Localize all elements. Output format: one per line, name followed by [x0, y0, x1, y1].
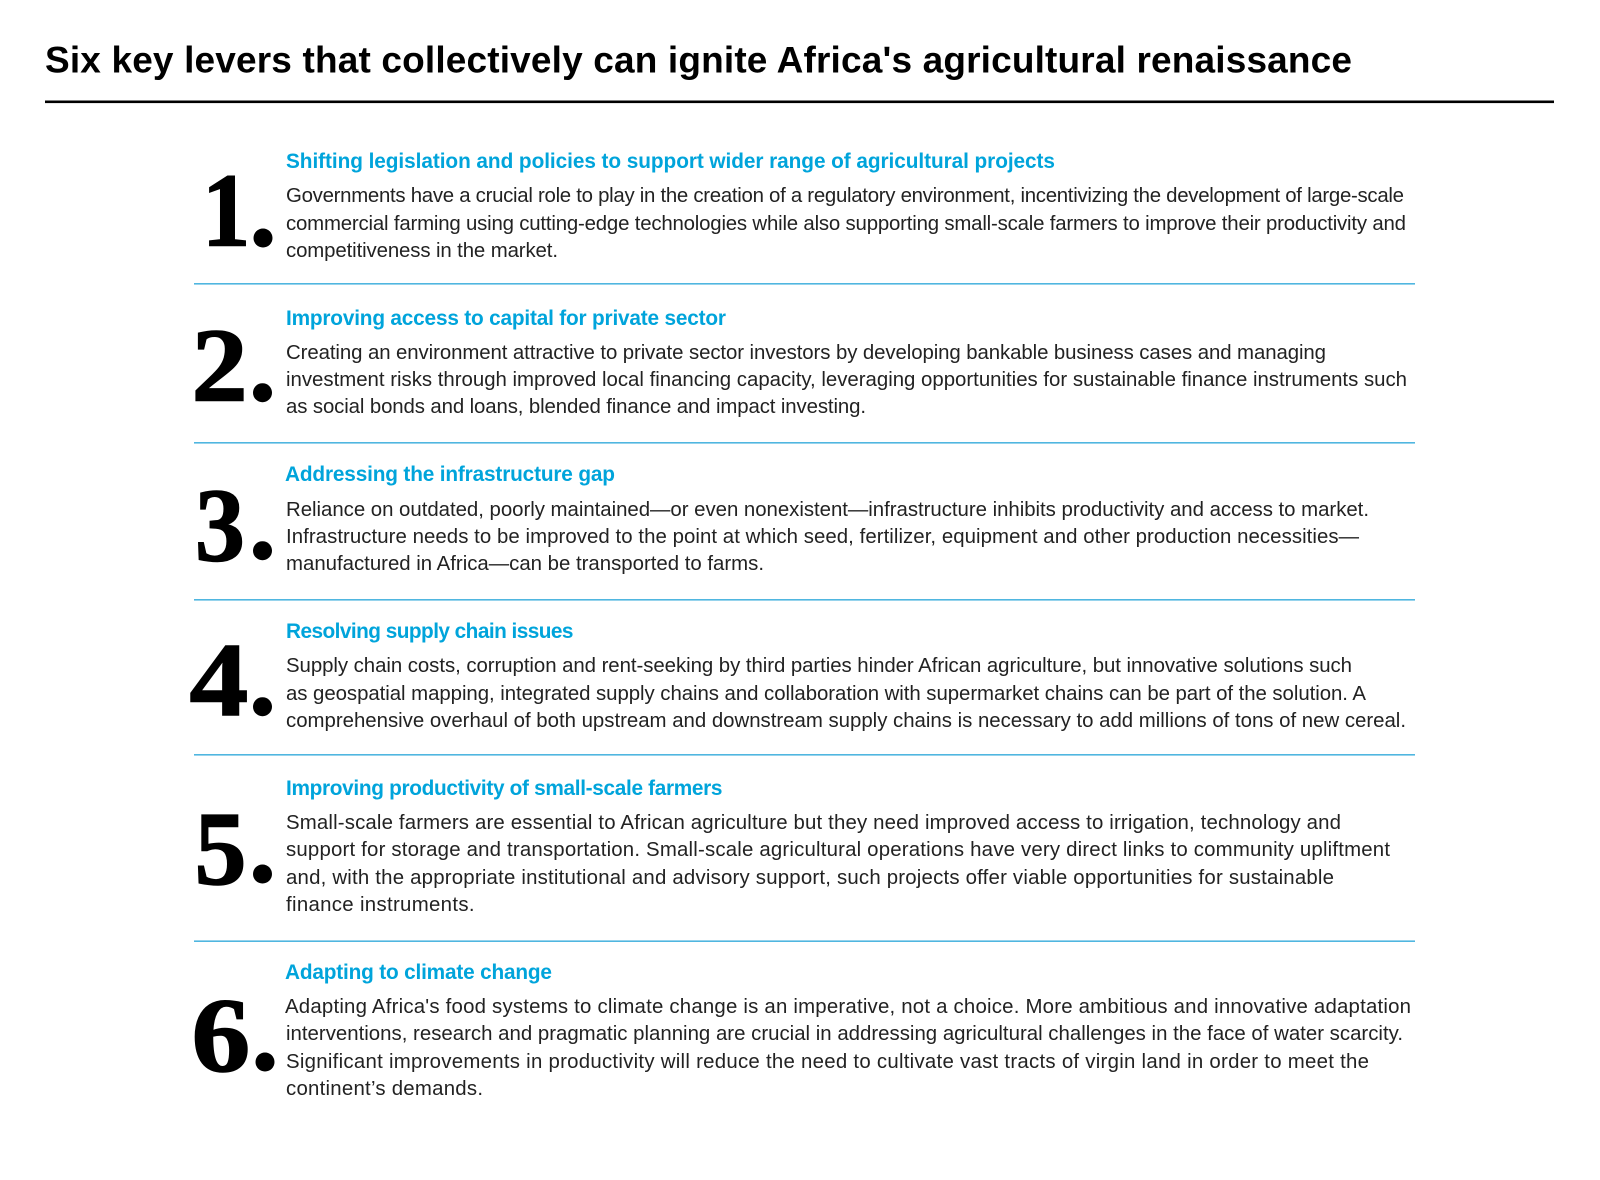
body text: lever 1: commercial farming using cutting-edge technologies while also supporting small-scale farmers to improve their productivity and	[286, 213, 1406, 235]
body text: lever 3	[286, 499, 1369, 575]
numeral 1	[202, 152, 272, 268]
panel: lever 5	[194, 777, 1390, 916]
numeral 2: 2	[192, 307, 248, 424]
panel: lever 2	[192, 307, 1407, 424]
body text: lever 3: Reliance on outdated, poorly maintained—or even nonexistent—infrastructure inhibits productivity and access to market.	[286, 499, 1369, 521]
numeral 3	[195, 468, 272, 584]
heading: lever 1: Shifting legislation and policies to support wider range of agricultural projects	[286, 150, 1055, 173]
body text: lever 4: as geospatial mapping, integrated supply chains and collaboration with supermarket chains can be part of the solution. A	[286, 683, 1366, 705]
body text: lever 3: Infrastructure needs to be improved to the point at which seed, fertilizer, equipment and other production necessities—	[286, 526, 1360, 548]
panel: lever 1	[202, 150, 1406, 268]
body text: lever 6: Adapting Africa's food systems to climate change is an imperative, not a choice. More ambitious and innovative adaptation	[285, 996, 1411, 1018]
numeral 1: 1	[202, 152, 250, 268]
body text: lever 4	[286, 655, 1406, 732]
body text: lever 4: comprehensive overhaul of both upstream and downstream supply chains is necessary to add millions of tons of new cereal.	[286, 710, 1406, 732]
numeral 5: 5	[194, 791, 246, 907]
body text: lever 3: manufactured in Africa—can be transported to farms.	[286, 553, 764, 575]
heading: lever 5: Improving productivity of small-scale farmers	[286, 777, 722, 800]
title: Six key levers that collectively can ignite Africa's agricultural renaissance	[45, 40, 1352, 80]
body text: lever 2: as social bonds and loans, blended finance and impact investing.	[286, 396, 866, 418]
heading: lever 2: Improving access to capital for private sector	[286, 307, 726, 330]
panel: lever 3	[195, 463, 1369, 584]
body text: lever 5: and, with the appropriate institutional and advisory support, such projects offer viable opportunities for sustainable	[286, 867, 1334, 889]
panel: lever 6	[192, 961, 1411, 1100]
heading: lever 6: Adapting to climate change	[285, 961, 552, 984]
heading: lever 3: Addressing the infrastructure gap	[285, 463, 615, 486]
body text: lever 1	[286, 185, 1406, 262]
numeral 6: 6	[192, 977, 250, 1095]
body text: lever 2	[286, 342, 1407, 418]
body text: lever 6: interventions, research and pragmatic planning are crucial in addressing agricultural challenges in the face of water scarcity.	[286, 1023, 1403, 1045]
body text: lever 6: continent’s demands.	[286, 1078, 483, 1100]
numeral 3: 3	[195, 468, 245, 584]
body text: lever 5	[286, 812, 1390, 916]
heading: lever 4: Resolving supply chain issues	[286, 620, 574, 643]
body text: lever 4: Supply chain costs, corruption and rent-seeking by third parties hinder African agriculture, but innovative solutions such	[286, 655, 1352, 677]
body text: lever 2: Creating an environment attractive to private sector investors by developing bankable business cases and managing	[286, 342, 1326, 364]
body text: lever 6: Significant improvements in productivity will reduce the need to cultivate vast tracts of virgin land in order to meet the	[286, 1051, 1369, 1073]
panel: lever 4	[190, 620, 1406, 739]
body text: lever 5: support for storage and transportation. Small-scale agricultural operations have very direct links to community upliftment	[286, 839, 1390, 861]
body text: lever 1: Governments have a crucial role to play in the creation of a regulatory environment, incentivizing the development of large-scale	[286, 185, 1404, 207]
body text: lever 5: finance instruments.	[286, 894, 474, 916]
numeral 5	[194, 791, 272, 907]
body text: lever 6	[285, 996, 1411, 1100]
body text: lever 1: competitiveness in the market.	[286, 240, 558, 262]
body text: lever 5: Small-scale farmers are essential to African agriculture but they need improved access to irrigation, technology and	[286, 812, 1341, 834]
numeral 2	[192, 307, 272, 424]
body text: lever 2: investment risks through improved local financing capacity, leveraging opportunities for sustainable finance instruments such	[286, 369, 1407, 391]
numeral 4: 4	[190, 623, 248, 739]
